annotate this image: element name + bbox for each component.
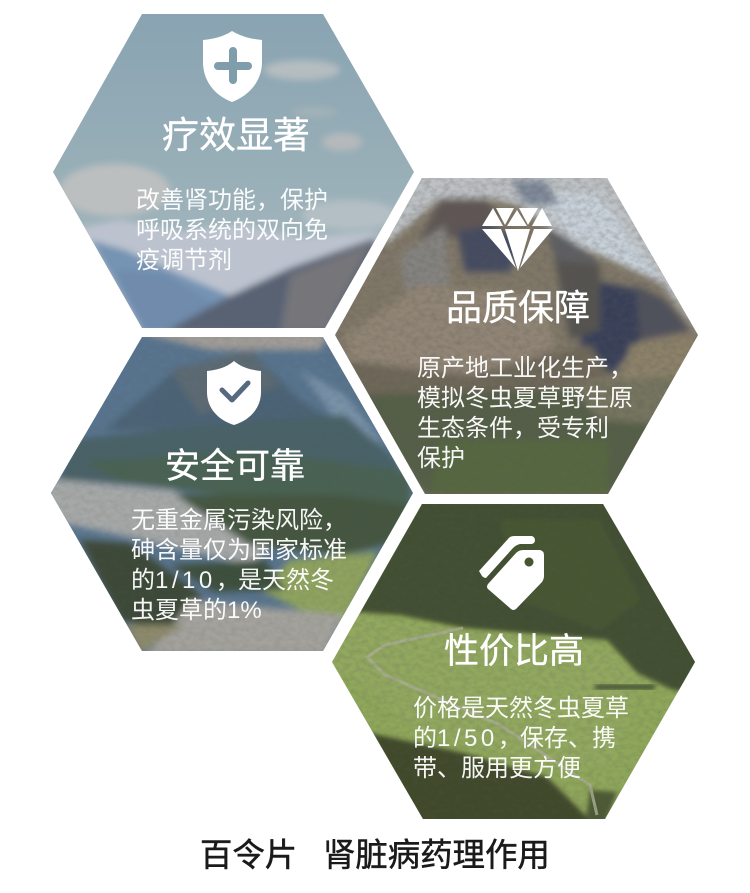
photo: rocky mountain peak [330,170,705,500]
hexagon panel: 疗效显著 [50,10,420,335]
body text: 品质保障 [417,355,633,472]
body text: 安全可靠: 无重金属污染风险， [131,507,347,534]
body text: 性价比高: 的1/50， [413,725,522,752]
icon: shield with plus [203,31,262,102]
body text: 疗效显著 [136,187,328,274]
body text: 疗效显著: 保护 [280,187,328,214]
caption title: 百令片 [200,837,297,873]
body text: 品质保障: 原产地工业化生产， [417,355,633,382]
heading: 疗效显著: 疗效显著 [162,115,310,156]
hexagon panel: 品质保障 [330,170,705,500]
body text: 品质保障: 生态条件， [417,415,537,442]
body text: 疗效显著: 改善肾功能， [136,187,280,214]
body text: 安全可靠: 是天然冬 [238,567,334,594]
photo: valley with river [40,332,415,655]
icon: price tags [479,536,544,610]
body text: 安全可靠: 砷含量仅为国家标准 [131,537,347,564]
body text: 疗效显著: 呼吸系统的双向免 [136,217,328,244]
body text: 性价比高 [413,695,629,782]
body text: 安全可靠: 的1/10， [131,567,240,594]
body text: 性价比高: 保存、携 [520,725,616,752]
heading: 性价比高: 性价比高 [444,632,584,671]
body text: 安全可靠: 虫夏草的1% [131,597,262,624]
heading: 品质保障: 品质保障 [446,287,590,328]
body text: 品质保障: 保护 [417,445,465,472]
icon: diamond [482,208,553,271]
body text: 安全可靠 [131,507,347,624]
icon: shield with check [207,361,261,425]
heading: 安全可靠: 安全可靠 [165,447,305,486]
caption title: 肾脏病药理作用 [323,837,550,873]
body text: 品质保障: 模拟冬虫夏草野生原 [417,385,633,412]
photo: forest and green field [330,500,700,825]
body text: 品质保障: 受专利 [537,415,609,442]
hexagon panel: 性价比高 [330,500,700,825]
body text: 疗效显著: 疫调节剂 [136,247,232,274]
body text: 性价比高: 带、服用更方便 [413,755,581,782]
photo: sky and snowy mountains [50,10,420,335]
body text: 性价比高: 价格是天然冬虫夏草 [413,695,629,722]
hexagon panel: 安全可靠 [40,332,415,655]
